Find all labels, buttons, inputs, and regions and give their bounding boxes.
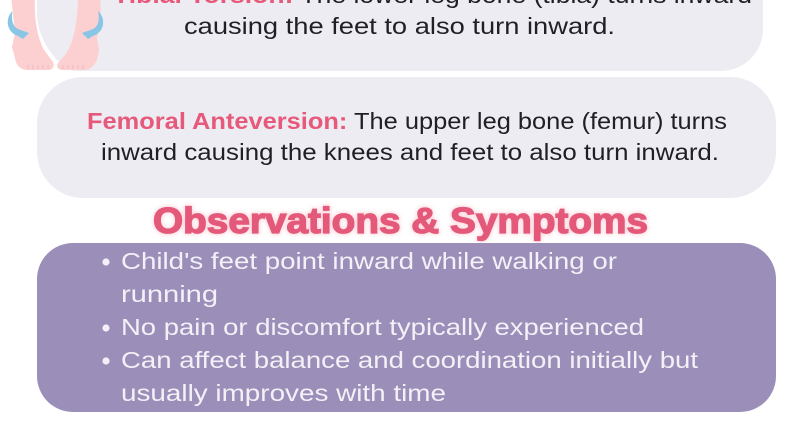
symptoms bullet list: Can affect balance and coordination initially but	[121, 347, 699, 373]
symptoms bullet list: No pain or discomfort typically experienced	[121, 314, 644, 340]
symptoms bullet list: usually improves with time	[121, 380, 446, 406]
symptoms bullet list: running	[121, 281, 218, 307]
tibial torsion text	[113, 0, 752, 39]
heading: observations and symptoms: Observations & Symptoms	[153, 200, 648, 241]
panel: femoral anteversion	[37, 77, 776, 198]
icon: right arrow	[82, 11, 103, 39]
panel: symptoms list	[37, 243, 776, 412]
panel: tibial torsion	[8, 0, 763, 72]
femoral anteversion text	[87, 108, 727, 165]
tibial torsion text: causing the feet to also turn inward.	[184, 13, 615, 39]
heading: observations and symptoms: Observations & Symptoms	[153, 200, 648, 241]
symptoms bullet list	[102, 248, 699, 406]
symptoms bullet list: Child's feet point inward while walking or	[121, 248, 617, 274]
icon: left arrow	[8, 11, 29, 39]
icon: feet turning inward	[8, 0, 103, 72]
femoral anteversion text: inward causing the knees and feet to also turn inward.	[101, 139, 719, 165]
femoral anteversion text: Femoral Anteversion: The upper leg bone (femur) turns	[87, 108, 727, 134]
